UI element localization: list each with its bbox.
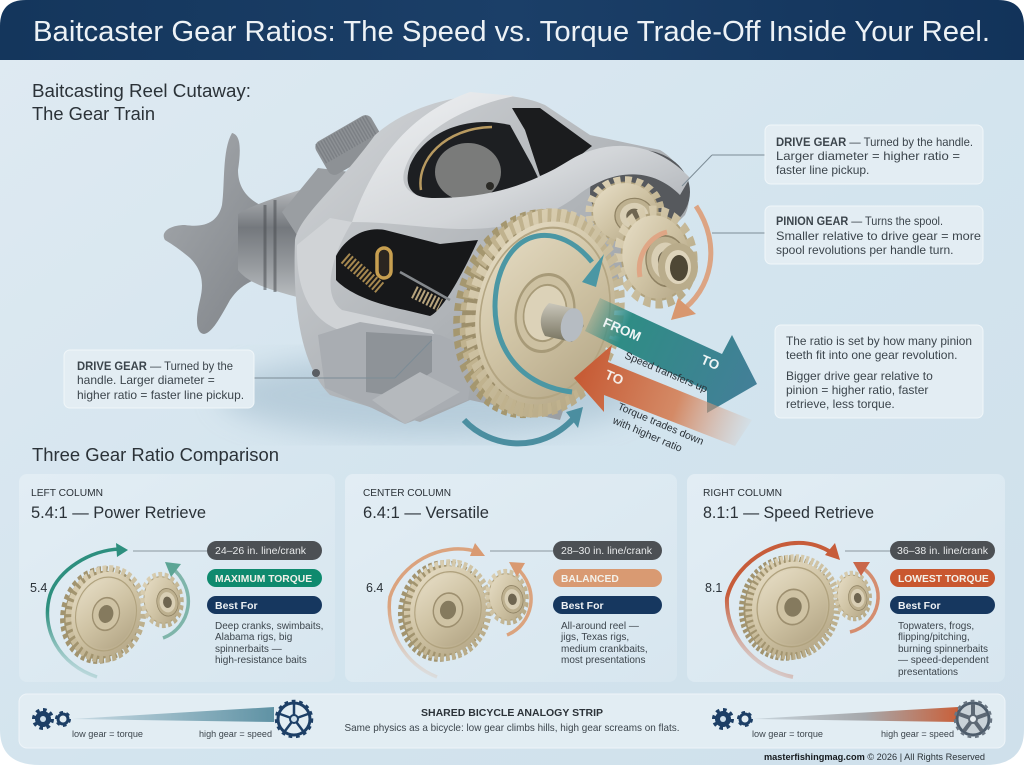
torque arrow: with higher ratio — [610, 414, 684, 455]
bicycle diagram: orange: low gear = torque — [752, 729, 823, 739]
panel: bicycle analogy strip — [19, 694, 1005, 748]
best-for text: presentations — [898, 667, 958, 678]
reel cutaway illustration — [164, 92, 711, 443]
best-for text: spinnerbaits — — [215, 644, 282, 655]
heading: reel cutaway — [32, 84, 250, 120]
stat pills: Best For — [215, 600, 258, 612]
panel: 6.4:1 versatile: CENTER COLUMN — [363, 487, 451, 499]
bicycle diagram: teal: high gear = speed — [199, 729, 272, 739]
stat pills: BALANCED — [561, 574, 619, 585]
bicycle diagram: teal: low gear = torque — [72, 729, 143, 739]
stat pills: LOWEST TORQUE — [898, 574, 989, 585]
callout: drive gear right: DRIVE GEAR — Turned by the handle. — [776, 135, 973, 149]
callout: ratio explanation: Bigger drive gear relative to — [786, 369, 933, 383]
stat pills — [553, 541, 662, 614]
stat pills — [890, 541, 995, 614]
ratio label: 6.4 — [366, 581, 383, 595]
best-for text: Alabama rigs, big — [215, 632, 292, 643]
drive gear — [453, 208, 625, 418]
callout: drive gear left — [64, 340, 432, 408]
best-for text: All-around reel — — [561, 621, 639, 632]
callout: drive gear right — [682, 125, 983, 186]
stat pills: MAXIMUM TORQUE — [215, 574, 312, 585]
side band — [297, 218, 434, 334]
best-for text: — speed-dependent — [898, 655, 989, 666]
footer credit: masterfishingmag.com © 2026 | All Rights Reserved — [764, 752, 985, 762]
callout: pinion gear: Smaller relative to drive gear = more — [776, 229, 981, 243]
best-for text — [898, 621, 989, 678]
callout: drive gear right: faster line pickup. — [776, 163, 869, 177]
speed arrow: from drive gear: Speed transfers up — [623, 350, 709, 395]
callout: ratio explanation: pinion = higher ratio, faster — [786, 383, 928, 397]
callout: drive gear right: Larger diameter = higher ratio = — [776, 149, 960, 163]
stat pills: 28–30 in. line/crank — [561, 545, 653, 557]
torque arrow: TO — [603, 367, 626, 388]
teal rotation arrow on gear — [495, 235, 604, 392]
reel body shell — [295, 95, 689, 422]
upper spool window — [408, 122, 542, 201]
strip description: Same physics as a bicycle: low gear climbs hills, high gear screams on flats. — [344, 722, 680, 734]
callout: drive gear left: higher ratio = faster line pickup. — [77, 388, 244, 402]
upper back gear — [590, 180, 660, 244]
best-for text — [560, 621, 648, 666]
stat pills: 24–26 in. line/crank — [215, 545, 307, 557]
panel: 8.1:1 speed retrieve — [687, 474, 1005, 682]
callout: drive gear left: handle. Larger diameter = — [77, 373, 215, 387]
callout: ratio explanation: teeth fit into one gear revolution. — [786, 348, 957, 362]
stat pills — [207, 541, 322, 614]
heading: comparison: Three Gear Ratio Comparison — [32, 445, 279, 465]
torque arrow — [574, 345, 752, 455]
best-for text — [215, 621, 323, 666]
panel: 6.4:1 versatile: 6.4:1 — Versatile — [363, 504, 489, 522]
panel: 8.1:1 speed retrieve: RIGHT COLUMN — [703, 487, 782, 499]
panel: 8.1:1 speed retrieve: 8.1:1 — Speed Retrieve — [703, 504, 874, 522]
best-for text: flipping/pitching, — [898, 632, 970, 643]
knurled knob — [315, 115, 379, 175]
gear housing — [590, 150, 690, 219]
callout: drive gear left: DRIVE GEAR — Turned by the — [77, 359, 233, 373]
gear shaft — [541, 303, 586, 344]
gear pair with arrows — [727, 543, 878, 677]
callout: pinion gear: spool revolutions per handle turn. — [776, 243, 953, 257]
panel: 5.4:1 power retrieve: 5.4:1 — Power Retrieve — [31, 504, 206, 522]
best-for text: Deep cranks, swimbaits, — [215, 621, 323, 632]
callout: ratio explanation: retrieve, less torque. — [786, 397, 895, 411]
strip title: SHARED BICYCLE ANALOGY STRIP — [421, 707, 603, 719]
best-for text: medium crankbaits, — [561, 644, 648, 655]
reel handle — [164, 133, 300, 334]
teal sweep arrow below gear — [464, 407, 583, 443]
panel: 5.4:1 power retrieve: LEFT COLUMN — [31, 487, 103, 499]
speed arrow: from drive gear: FROM — [601, 315, 643, 344]
pinion rotation arc — [671, 206, 711, 320]
pinion gear — [613, 206, 699, 308]
gear pair with arrows — [47, 543, 188, 677]
callout: pinion gear: PINION GEAR — Turns the spool. — [776, 214, 943, 228]
best-for text: high-resistance baits — [215, 655, 307, 666]
bicycle diagram: teal — [34, 701, 312, 739]
heading: reel cutaway: Baitcasting Reel Cutaway: — [32, 81, 251, 101]
lower gear window — [336, 229, 478, 316]
panel: 5.4:1 power retrieve — [19, 474, 335, 682]
best-for text: most presentations — [561, 655, 646, 666]
best-for text: burning spinnerbaits — [898, 644, 988, 655]
knob neck — [282, 168, 346, 234]
best-for text: jigs, Texas rigs, — [560, 632, 629, 643]
title banner — [0, 0, 1024, 60]
torque arrow: Torque trades down — [616, 401, 706, 448]
callout: pinion gear — [712, 206, 983, 264]
stat pills: Best For — [561, 600, 604, 612]
best-for text: Topwaters, frogs, — [898, 621, 974, 632]
panel: 6.4:1 versatile — [345, 474, 677, 682]
speed arrow: from drive gear — [585, 298, 757, 413]
ratio label: 5.4 — [30, 581, 47, 595]
ratio label: 8.1 — [705, 581, 722, 595]
stat pills: Best For — [898, 600, 941, 612]
title banner: Baitcaster Gear Ratios: The Speed vs. Torque Trade-Off Inside Your Reel. — [33, 16, 990, 48]
stat pills: 36–38 in. line/crank — [897, 545, 989, 557]
bicycle diagram: orange — [714, 701, 991, 739]
speed arrow: from drive gear: TO — [699, 352, 722, 373]
bicycle diagram: orange: high gear = speed — [881, 729, 954, 739]
heading: reel cutaway: The Gear Train — [32, 104, 155, 124]
black side plate — [512, 108, 592, 176]
callout: ratio explanation — [775, 325, 983, 418]
silver frame — [352, 92, 690, 229]
lower foot — [318, 322, 442, 424]
callout: ratio explanation: The ratio is set by how many pinion — [786, 334, 972, 348]
gear pair with arrows — [389, 543, 531, 677]
